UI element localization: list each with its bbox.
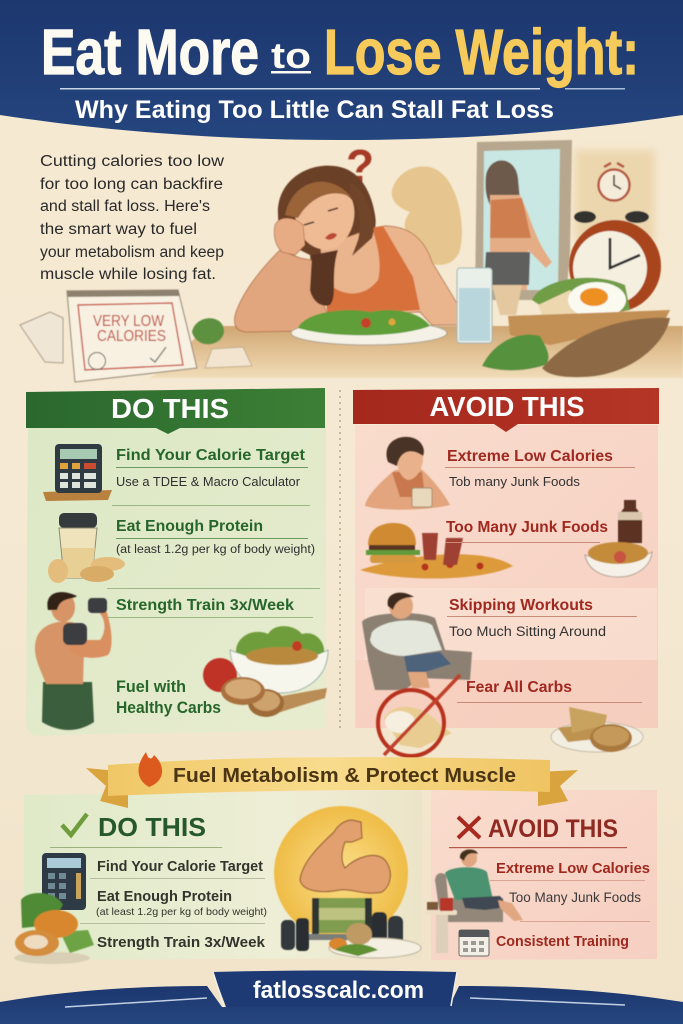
table	[150, 326, 683, 378]
icon: burger and pizza	[360, 523, 513, 579]
panel: do this	[26, 388, 328, 736]
intro text: muscle while losing fat.	[40, 266, 216, 283]
lower avoid heading: AVOID THIS	[488, 815, 618, 843]
alarm clock	[569, 211, 661, 312]
lower avoid list	[490, 861, 650, 950]
icon: cola and snacks	[585, 500, 652, 577]
panel: lower avoid this	[425, 790, 657, 960]
panel: do this: Use a TDEE & Macro Calculator	[116, 474, 301, 489]
hero illustration	[20, 140, 683, 382]
icon: protein shaker	[48, 513, 125, 583]
step: calorie target: Find Your Calorie Target	[116, 447, 305, 464]
do this heading	[26, 388, 325, 434]
icon: calculator	[43, 444, 112, 501]
intro text: your metabolism and keep	[40, 244, 224, 261]
panel: do this: (at least 1.2g per kg of body weight)	[116, 544, 315, 556]
desk calendar: CALORIES	[97, 328, 166, 345]
salad plate	[291, 310, 447, 345]
lower do list: Eat Enough Protein	[97, 888, 232, 905]
icon: check mark	[62, 814, 87, 835]
step: protein: Eat Enough Protein	[116, 518, 263, 535]
footer band	[0, 970, 683, 1024]
food board	[482, 278, 670, 377]
panel: lower do this	[14, 790, 422, 964]
step: carbs: Healthy Carbs	[116, 699, 221, 717]
thought silhouette	[392, 166, 462, 265]
muscle illustration	[274, 806, 421, 958]
step: junk foods: Too Many Junk Foods	[446, 519, 608, 536]
lower avoid list: Extreme Low Calories	[496, 861, 650, 877]
intro text: the smart way to fuel	[40, 221, 197, 238]
woman	[235, 166, 460, 332]
panel: avoid this: Tob many Junk Foods	[449, 474, 581, 489]
lower do list	[80, 859, 267, 951]
desk calendar	[20, 290, 197, 382]
do this heading: DO THIS	[111, 393, 229, 424]
icon: strength man	[35, 592, 112, 730]
step: extreme low: Extreme Low Calories	[447, 448, 613, 465]
mirror	[475, 140, 572, 315]
panel: avoid this: Too Much Sitting Around	[449, 624, 606, 639]
icon: no bread	[378, 675, 460, 756]
panel: avoid this	[353, 388, 659, 756]
wall patch	[575, 150, 655, 240]
banner text: Fuel Metabolism & Protect Muscle	[173, 765, 516, 787]
icon: tired person	[365, 437, 450, 510]
intro text: and stall fat loss. Here's	[40, 198, 210, 215]
wall clock	[598, 163, 630, 200]
step: fear carbs: Fear All Carbs	[466, 679, 572, 696]
step: carbs: Fuel with	[116, 678, 186, 696]
lower do heading: DO THIS	[98, 812, 206, 842]
icon: vegetables	[14, 893, 94, 964]
icon: x mark	[458, 817, 480, 838]
lower avoid list: Consistent Training	[496, 934, 629, 950]
avoid this heading	[353, 388, 659, 432]
icon: man on couch	[362, 593, 472, 690]
calendar text: VERY LOW	[93, 313, 165, 330]
icon: bread plate	[551, 707, 643, 752]
step: strength: Strength Train 3x/Week	[116, 597, 294, 614]
icon: flame	[138, 752, 162, 787]
receipt	[205, 347, 252, 368]
small salad garnish	[192, 318, 224, 344]
footer url: fatlosscalc.com	[253, 977, 424, 1004]
subtitle: Why Eating Too Little Can Stall Fat Loss	[75, 96, 554, 124]
lower avoid list: Too Many Junk Foods	[509, 890, 641, 905]
glass of water	[457, 268, 492, 343]
title connector word: to	[271, 35, 311, 76]
lower do list: Find Your Calorie Target	[97, 859, 263, 875]
avoid this heading: AVOID THIS	[430, 391, 584, 422]
header band	[0, 0, 683, 140]
banner: fuel metabolism	[86, 752, 578, 808]
lower do list: (at least 1.2g per kg of body weight)	[96, 906, 267, 918]
lower do list: Strength Train 3x/Week	[97, 935, 266, 951]
question mark: ?	[346, 140, 374, 192]
intro text: for too long can backfire	[40, 176, 223, 193]
icon: man in armchair	[425, 849, 523, 953]
icon: calculator small	[42, 853, 86, 910]
icon: bowl and bread	[203, 626, 328, 717]
icon: calendar	[459, 930, 489, 956]
intro text: Cutting calories too low	[40, 153, 225, 170]
title: eat more: Eat More	[41, 16, 259, 88]
center dashed divider	[339, 390, 341, 730]
step: skipping workouts: Skipping Workouts	[449, 597, 593, 614]
